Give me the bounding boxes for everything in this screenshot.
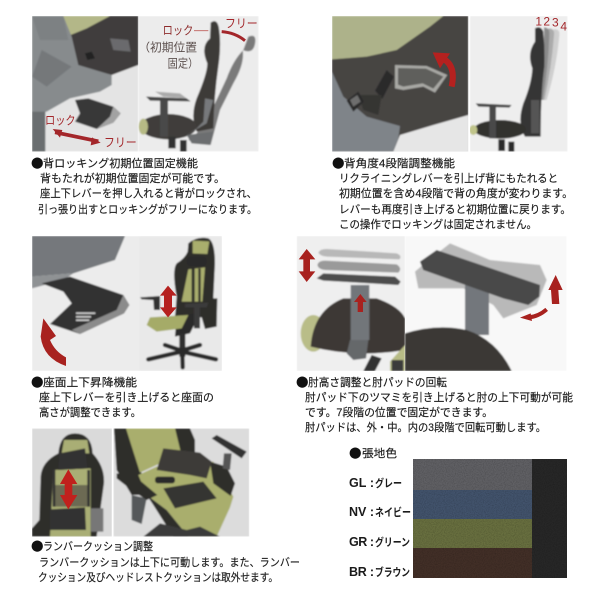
panel: upholstery colours [349, 443, 567, 579]
text block: back locking: 座上下レバーを押し入れると背がロックされ、 [40, 186, 257, 200]
arrow: lock pointer [194, 30, 208, 32]
text block: seat height: 座面上下昇降機能 [43, 375, 137, 389]
arrow: armrest up and down [299, 249, 315, 282]
label: free: フリー [225, 17, 258, 31]
text block: lumbar cushion [31, 536, 300, 584]
text block: recline angle [332, 153, 573, 231]
text block: lumbar cushion: ランバークッション調整 [43, 539, 153, 553]
text block: back locking: ● [31, 153, 44, 172]
text block: lumbar cushion: ● [31, 536, 44, 555]
label: BR [349, 565, 410, 579]
arrow: lock free [53, 129, 101, 145]
label: lock: ロック [45, 113, 76, 127]
photo: recline lever close-up [332, 16, 468, 152]
text block: back locking: 背ロッキング初期位置固定機能 [43, 156, 198, 170]
panel: seat height [31, 236, 222, 419]
text block: armrest adjustment: 肘高さ調整と肘パッドの回転 [308, 375, 447, 389]
label: NV [349, 505, 411, 519]
heading: upholstery colours [349, 443, 397, 462]
text block: recline angle: 初期位置を含め4段階で背の角度が変わります。 [339, 186, 573, 200]
label: BR: BR : [349, 565, 374, 579]
label: BR: ブラウン [375, 565, 410, 579]
swatch texture [413, 459, 567, 578]
text block: back locking [31, 153, 257, 216]
text block: back locking: 引っ張り出すとロッキングがフリーになります。 [38, 202, 257, 216]
text block: recline angle: この操作でロッキングは固定されません。 [339, 217, 537, 231]
swatch: black fabric [532, 459, 567, 578]
text block: seat height: 高さが調整できます。 [39, 405, 141, 419]
heading: upholstery colours: ● [349, 443, 362, 462]
text block: back locking: 背もたれが初期位置固定が可能です。 [40, 171, 225, 185]
labels: positions 1 to 4: 4 [560, 19, 567, 33]
arrow: knob up [354, 294, 367, 312]
arrow: free swoosh [222, 32, 245, 41]
label: GL: GL : [349, 476, 374, 490]
photo: reclined chair side view [138, 16, 259, 152]
photo: armrest height [297, 236, 405, 371]
text block: recline angle: 背角度4段階調整機能 [344, 156, 455, 170]
text block: recline angle: レバーも再度引き上げると初期位置に戻ります。 [339, 202, 571, 216]
panel: lumbar cushion [31, 428, 300, 584]
text block: armrest adjustment: です。7段階の位置で固定ができます。 [305, 405, 493, 419]
panel: recline angle [332, 14, 573, 231]
arrow: lever up [433, 52, 453, 87]
text block: armrest adjustment: ● [296, 372, 309, 391]
labels: positions 1 to 4: 2 [543, 14, 550, 28]
panel: armrest adjustment [296, 236, 573, 434]
photo: lumbar cushion front [32, 428, 112, 537]
labels: positions 1 to 4 [536, 17, 567, 30]
panel: back locking [31, 16, 259, 216]
photo: recline positions [469, 14, 568, 152]
labels: positions 1 to 4: 1 [535, 14, 542, 28]
photo: armrest rotation [405, 236, 567, 371]
text block: recline angle: ● [332, 153, 345, 172]
text block: lumbar cushion: クッション及びヘッドレストクッションは取外せます。 [38, 571, 278, 584]
swatch: brown [413, 548, 532, 578]
label: GR: GR : [349, 535, 374, 549]
swatch: grey [413, 459, 532, 490]
arrow: lever up [41, 318, 66, 366]
heading: upholstery colours: 張地色 [362, 447, 397, 460]
labels: positions 1 to 4: 3 [552, 16, 559, 30]
photo: seat lever and chair [32, 236, 222, 371]
photo: locking lever close-up [32, 16, 138, 152]
label: initial position: （初期位置 [138, 40, 197, 54]
arrow: seat up and down [160, 286, 177, 317]
text block: seat height: 座上下レバーを引き上げると座面の [39, 390, 214, 404]
label: NV: NV : [349, 505, 374, 519]
label: lock: ロック [163, 24, 193, 38]
text block: recline angle: リクライニングレバーを引上げ背にもたれると [339, 171, 558, 185]
label: GR: グリーン [375, 535, 410, 549]
swatch: navy [413, 490, 532, 519]
label: NV: ネイビー [375, 505, 411, 519]
text block: armrest adjustment: 肘パッド下のツマミを引き上げると肘の上下可動が可能 [305, 390, 573, 404]
text block: seat height [31, 372, 214, 419]
arrow: cushion up and down [60, 469, 77, 509]
text block: armrest adjustment: 肘パッドは、外・中。内の3段階で回転可動します。 [305, 420, 546, 434]
text block: seat height: ● [31, 372, 44, 391]
text block: lumbar cushion: ランバークッションは上下に可動します。また、ランバー [39, 555, 300, 569]
label: free: フリー [104, 135, 137, 149]
text block: armrest adjustment [296, 372, 573, 434]
label: fixed: 固定） [168, 57, 198, 71]
photo: removable cushions [113, 428, 249, 537]
swatch: green [413, 519, 532, 548]
label: GL [349, 476, 402, 490]
label: GL: グレー [375, 476, 402, 490]
arrow: rotation [520, 275, 563, 321]
label: GR [349, 535, 410, 549]
